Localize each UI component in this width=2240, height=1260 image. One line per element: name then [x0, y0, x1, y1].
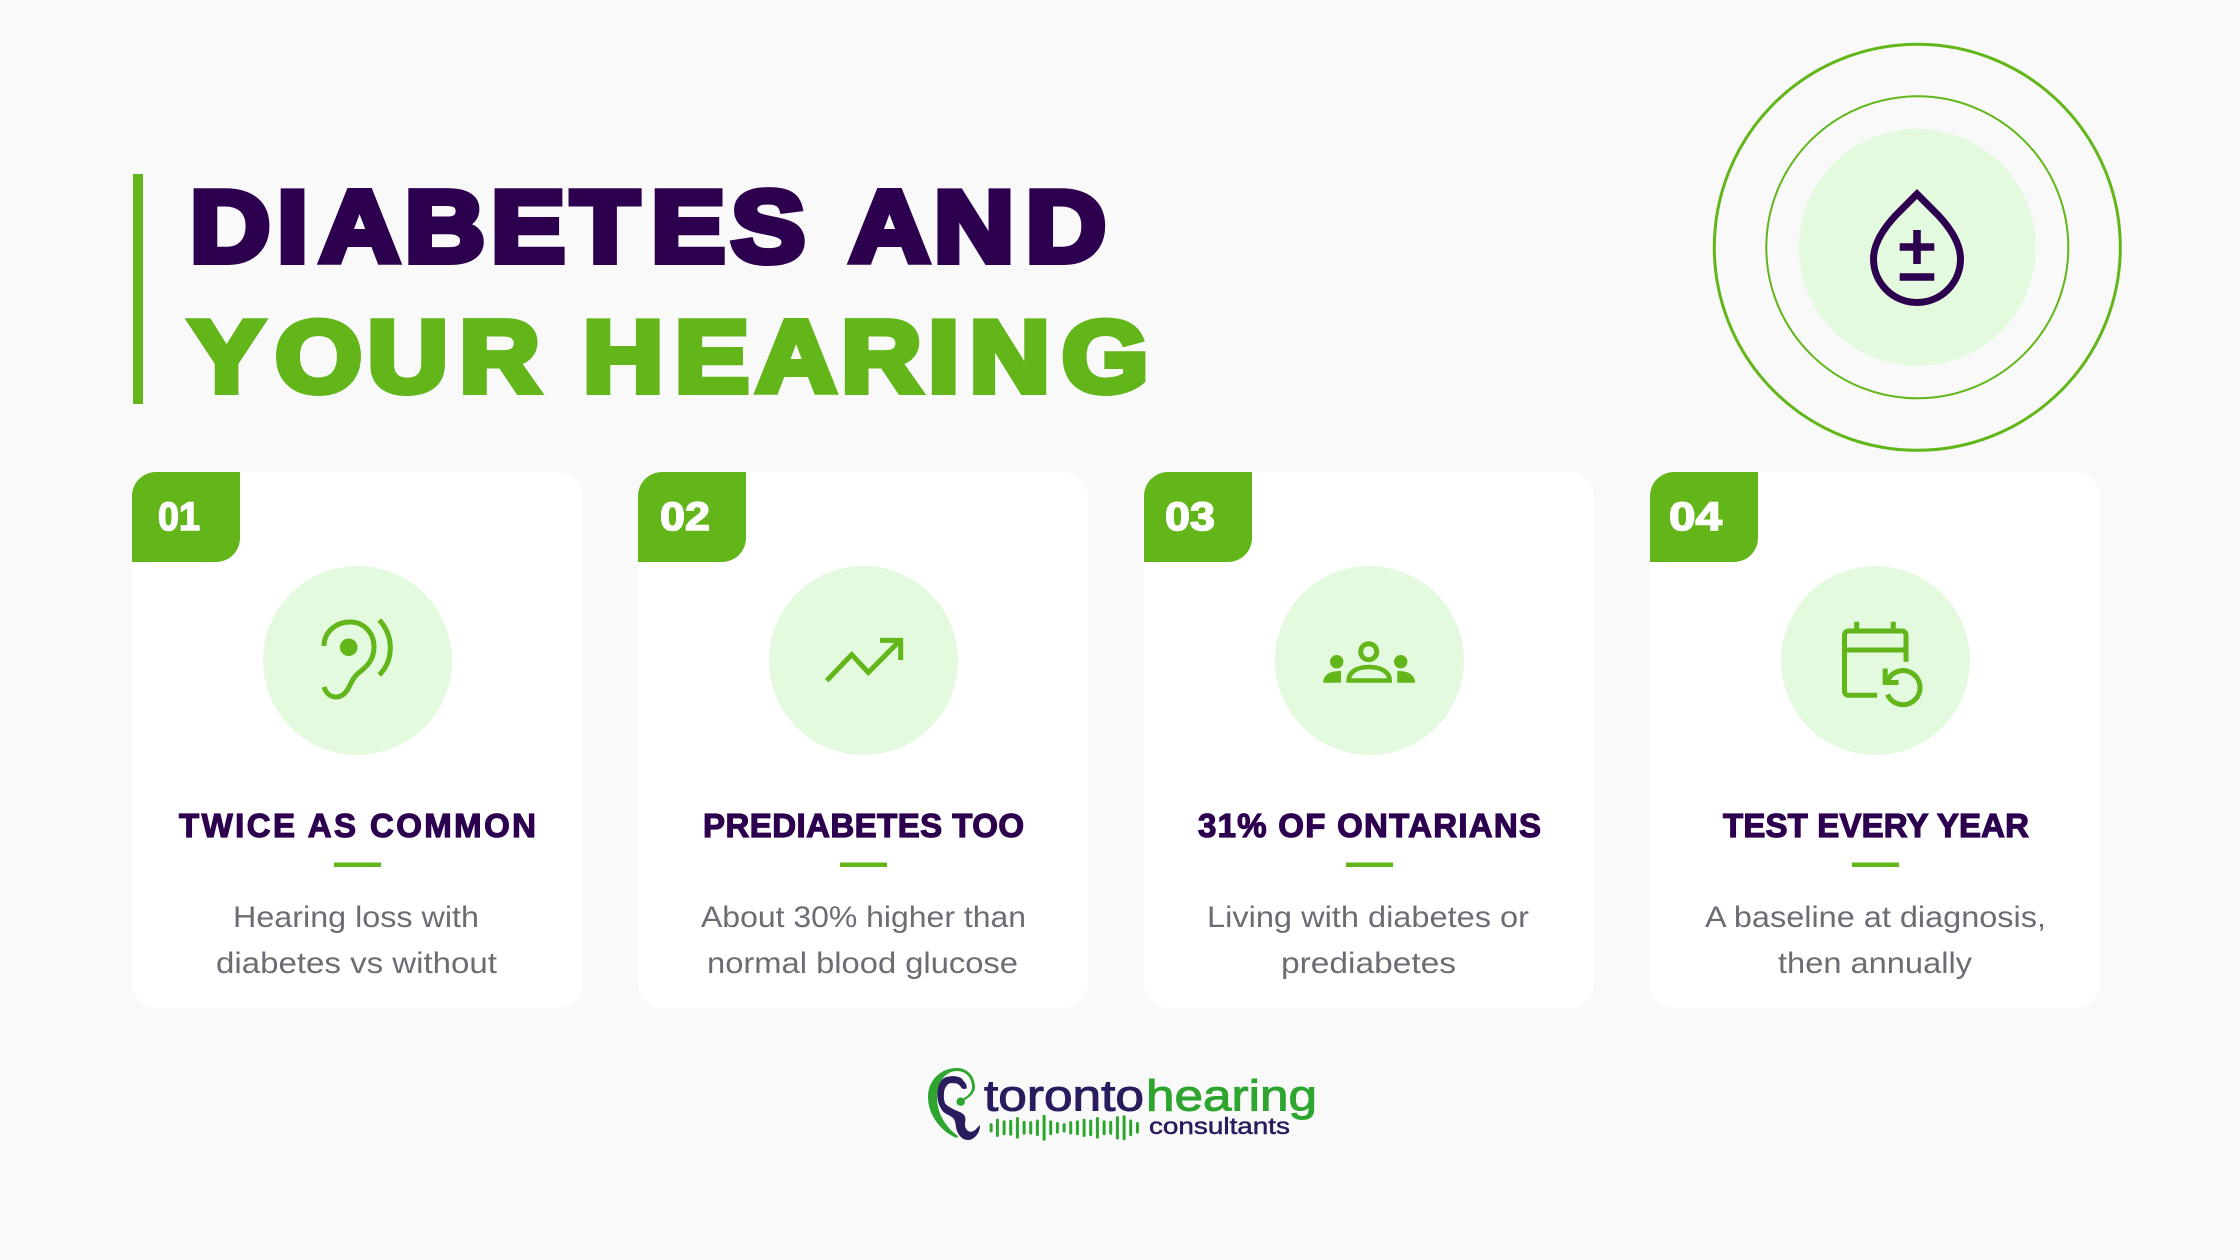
divider	[1346, 862, 1393, 867]
icon: logo ear	[928, 1068, 980, 1140]
heading: 31% OF ONTARIANS	[1198, 807, 1541, 844]
panel: card 3 31% of Ontarians	[1144, 472, 1594, 1008]
logo sound wave	[990, 1115, 1139, 1141]
title: DIABETES AND	[190, 171, 1106, 283]
description: Living with diabetes or	[1207, 901, 1529, 934]
logo wordmark	[984, 1072, 1317, 1139]
divider	[1852, 862, 1899, 867]
title: YOUR HEARING	[190, 301, 1148, 413]
divider	[840, 862, 887, 867]
badge 02: 02	[660, 495, 710, 539]
heading: PREDIABETES TOO	[703, 807, 1024, 844]
logo wordmark: consultants	[1149, 1113, 1290, 1139]
logo wordmark: toronto	[984, 1072, 1144, 1120]
panel: card 1 twice as common	[132, 472, 582, 1008]
badge 01: 01	[158, 495, 200, 539]
logo wordmark: hearing	[1146, 1072, 1317, 1120]
panel: card 2 prediabetes too	[638, 472, 1088, 1008]
description	[1705, 901, 2046, 980]
badge 04	[1650, 472, 1758, 562]
badge 04: 04	[1669, 495, 1723, 539]
icon: ear with sound wave	[263, 566, 452, 755]
icon: group of people	[1275, 566, 1464, 755]
logo: toronto hearing consultants	[928, 1068, 1317, 1141]
title	[133, 171, 1148, 413]
heading: TWICE AS COMMON	[179, 807, 536, 844]
description: Hearing loss with	[233, 901, 479, 934]
description	[701, 901, 1026, 980]
divider	[334, 862, 381, 867]
badge 01	[132, 472, 240, 562]
description: About 30% higher than	[701, 901, 1026, 934]
icon: blood drop with concentric rings	[1714, 44, 2120, 450]
panel: card 4 test every year	[1650, 472, 2100, 1008]
description: normal blood glucose	[707, 947, 1018, 980]
description: then annually	[1778, 947, 1972, 980]
badge 03	[1144, 472, 1252, 562]
heading: TEST EVERY YEAR	[1723, 807, 2029, 844]
description: prediabetes	[1281, 947, 1456, 980]
icon: trending up arrow	[769, 566, 958, 755]
badge 03: 03	[1165, 495, 1215, 539]
description	[1207, 901, 1529, 980]
badge 02	[638, 472, 746, 562]
description: A baseline at diagnosis,	[1705, 901, 2046, 934]
description	[216, 901, 498, 980]
description: diabetes vs without	[216, 947, 498, 980]
icon: calendar with refresh arrow	[1781, 566, 1970, 755]
